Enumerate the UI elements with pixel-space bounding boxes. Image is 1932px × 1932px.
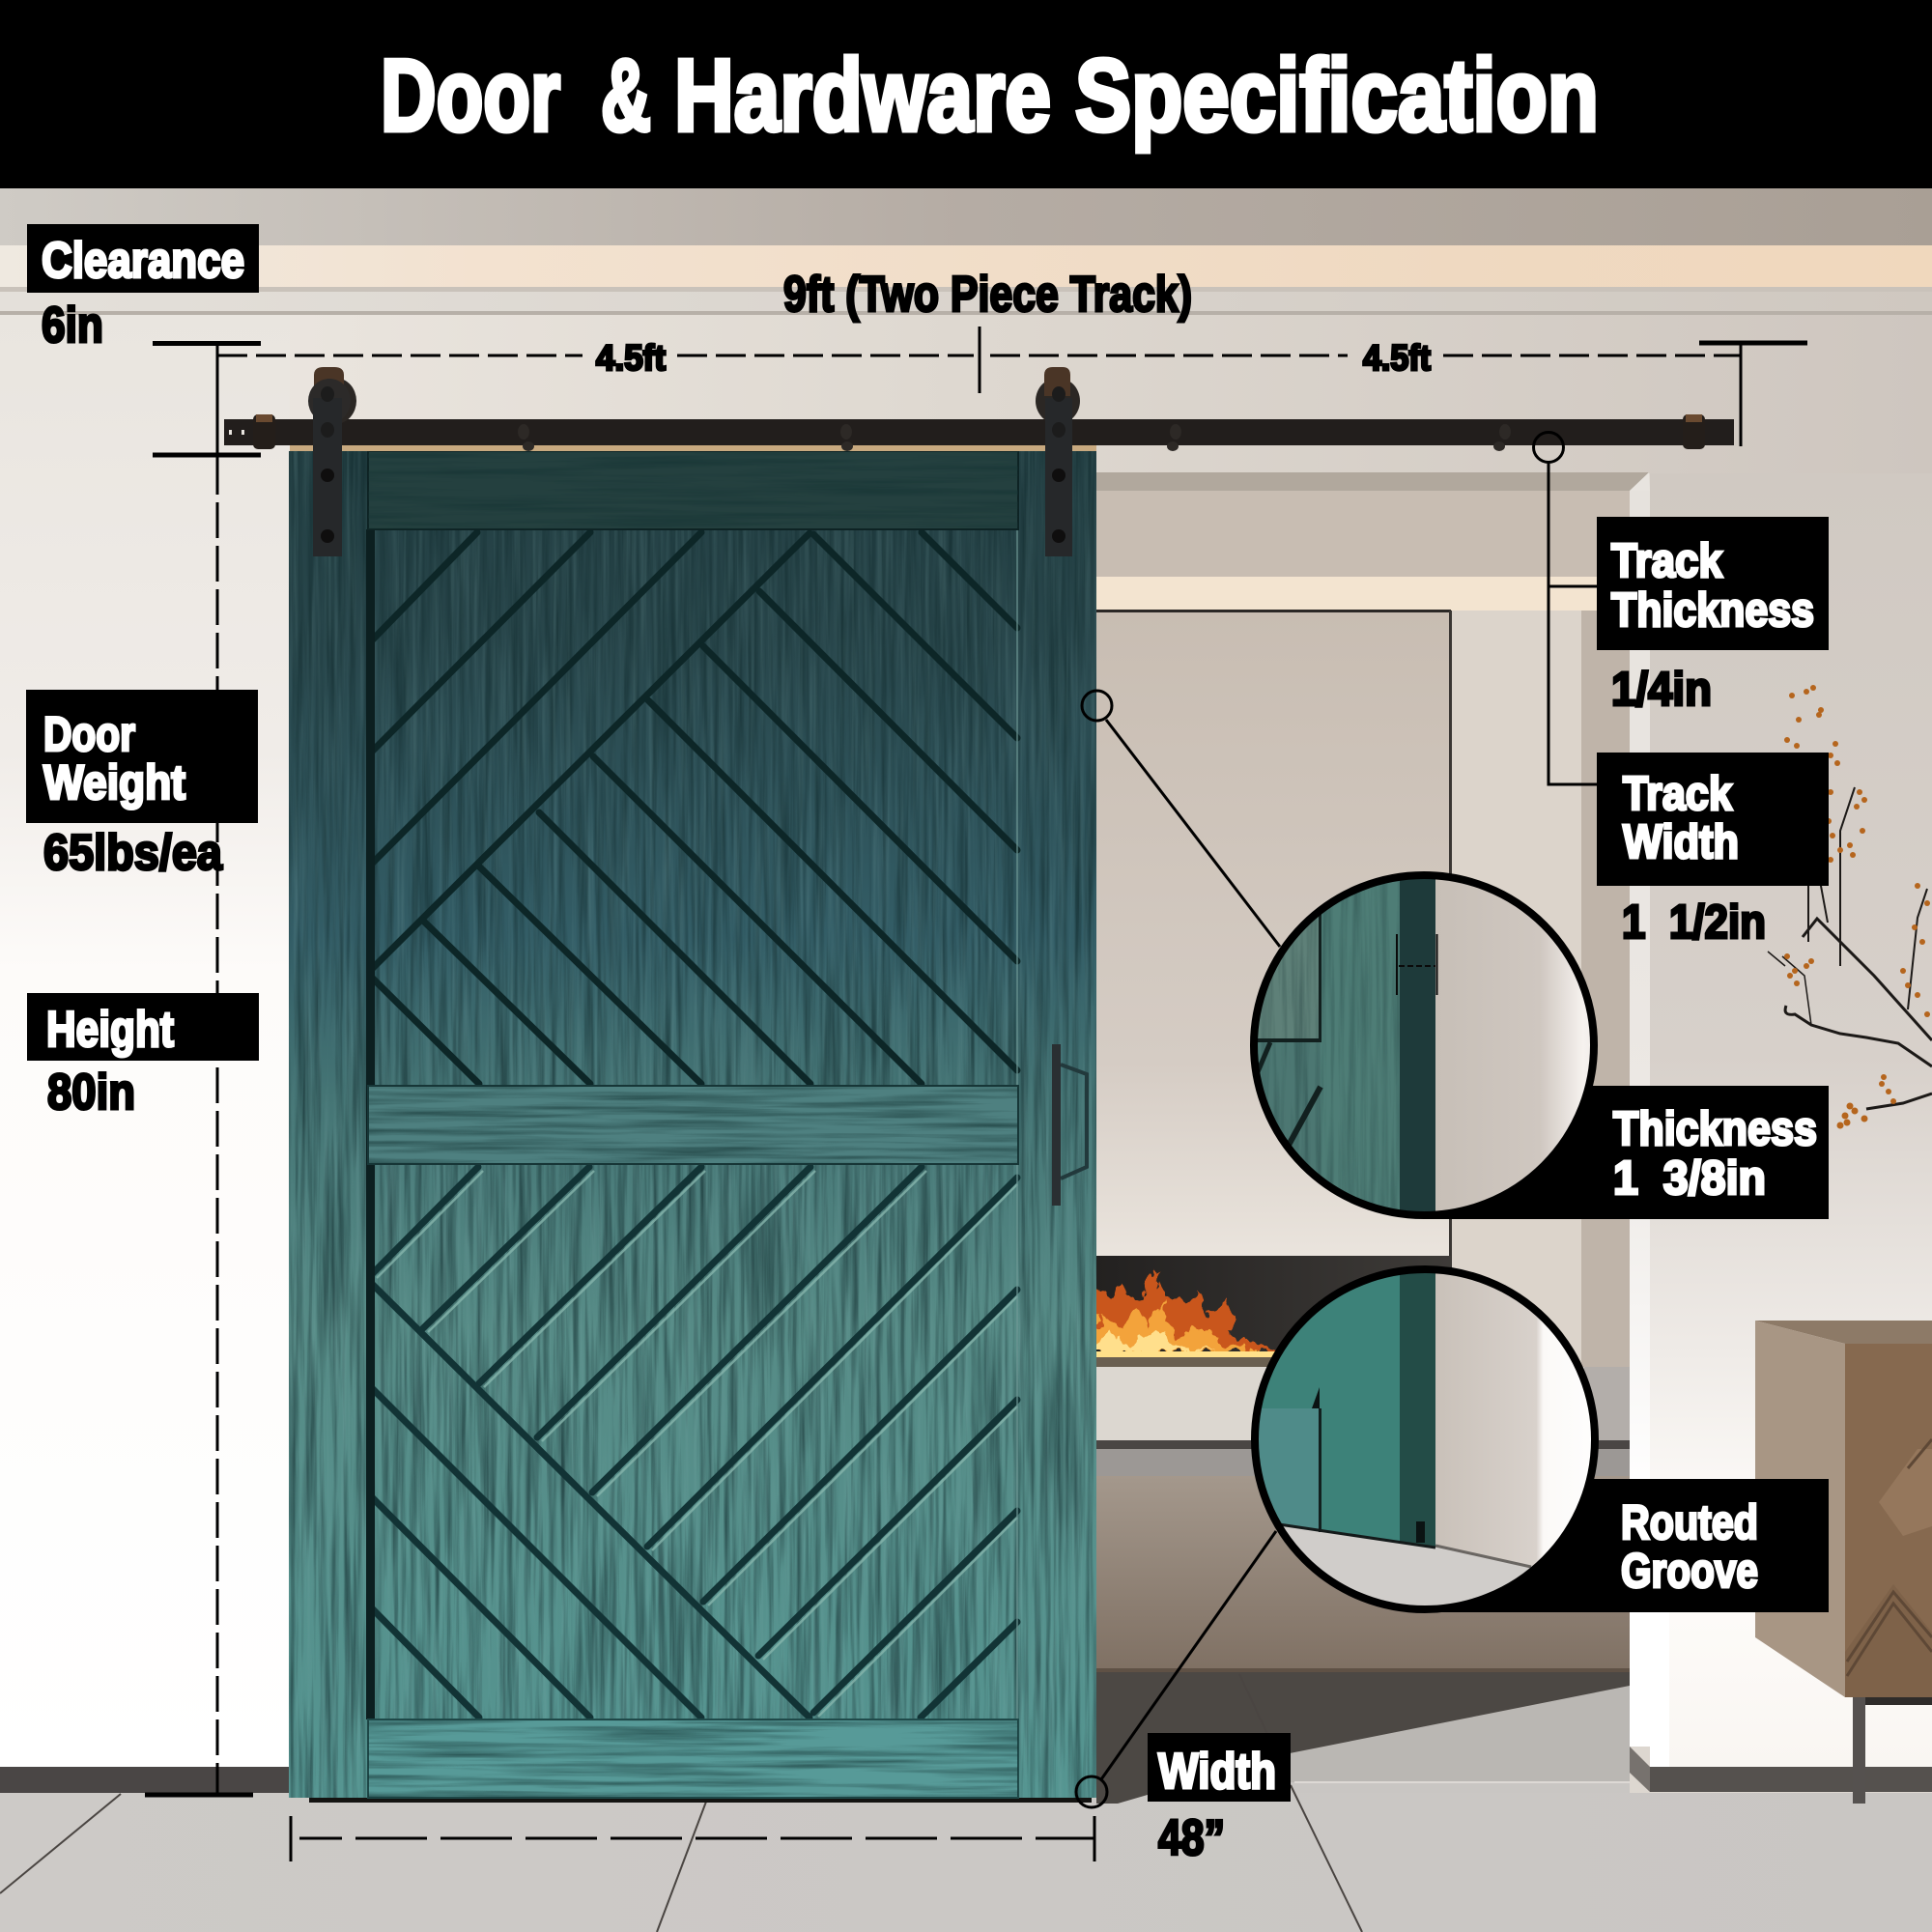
baseboards: [0, 1767, 290, 1793]
ceiling: [0, 188, 1932, 245]
label: door thickness: Thickness: [1613, 1103, 1817, 1155]
floor: [0, 1793, 1932, 1932]
callout leader lines: [1076, 433, 1604, 1807]
label: width: Width: [1158, 1744, 1276, 1800]
label: track width: 1 1/2in: [1622, 896, 1766, 949]
pier: [1630, 491, 1650, 1747]
label: routed groove: Routed: [1621, 1495, 1758, 1549]
track point marker: [1534, 433, 1563, 462]
label: routed groove: Groove: [1621, 1544, 1758, 1598]
label: door weight: 65lbs/ea: [43, 825, 223, 881]
upper panel grooves: [371, 532, 1017, 1084]
dimension lines: track length: [217, 327, 1807, 446]
stile shadows: [366, 529, 375, 1719]
wooden cabinet: [1755, 1321, 1932, 1804]
wood header strip: [290, 445, 1096, 451]
label: door thickness: 1 3/8in: [1613, 1152, 1766, 1205]
label: height: [27, 993, 259, 1121]
door handle: [1052, 1044, 1087, 1206]
label: track thickness: Thickness: [1611, 584, 1814, 637]
flames: [1092, 1270, 1280, 1357]
label: track thickness: Track: [1611, 535, 1723, 587]
left hanger: [308, 367, 356, 556]
label: clearance: [27, 224, 259, 354]
label: door weight: [26, 690, 258, 881]
label: track length: 9ft (Two Piece Track): [783, 267, 1192, 323]
track bolts: [518, 424, 1511, 451]
right hanger: [1036, 367, 1080, 556]
decorative branch with berries: [1768, 685, 1932, 1128]
barn door: [289, 451, 1096, 1803]
track hardware: [224, 367, 1734, 556]
track end holes: [229, 430, 244, 435]
interior alcove: [1096, 472, 1630, 1477]
ceiling glow band: [0, 245, 1932, 289]
title: [381, 39, 1599, 153]
label: width: [1148, 1733, 1291, 1866]
label: track width: [1597, 753, 1829, 949]
groove marker: [1076, 1776, 1107, 1807]
label: track thickness: [1597, 517, 1829, 716]
door slab: [289, 451, 1096, 1798]
dimension lines: clearance and height: [145, 343, 261, 1795]
door shadow: [309, 1795, 1092, 1803]
label: track length: [596, 267, 1431, 378]
top rail: [368, 451, 1018, 529]
label: width: 48”: [1158, 1810, 1225, 1866]
label: routed groove: [1425, 1479, 1829, 1612]
detail circle: door thickness: [1252, 869, 1609, 1224]
label: track width: Track: [1623, 768, 1733, 820]
left wall: [0, 315, 290, 1767]
lower panel groove highlights: [377, 1171, 1017, 1717]
track stops: [253, 414, 1705, 449]
label: track thickness: 1/4in: [1611, 664, 1712, 716]
label: door weight: Weight: [43, 755, 185, 810]
label: clearance: Clearance: [42, 233, 244, 289]
rug: [1096, 1476, 1630, 1672]
label: height: 80in: [47, 1065, 135, 1121]
middle rail: [368, 1086, 1018, 1164]
bottom rail: [368, 1719, 1018, 1798]
dimension lines: door width: [291, 1816, 1094, 1861]
title: Specification: [1075, 39, 1599, 153]
label: track length: 4.5ft: [1363, 338, 1431, 378]
title banner: [0, 0, 1932, 188]
label: height: Height: [46, 1002, 174, 1058]
floor tile joints: [0, 1674, 1630, 1932]
detail circle: routed groove: [1252, 1265, 1609, 1613]
label: door weight: Door: [43, 707, 135, 761]
title: Door: [381, 39, 560, 153]
label: door thickness: [1424, 1086, 1829, 1219]
track rail: [224, 419, 1734, 445]
label: track width: Width: [1623, 816, 1739, 868]
label: track length: 4.5ft: [596, 338, 666, 378]
label: clearance: 6in: [42, 298, 103, 354]
title: &: [601, 39, 651, 153]
right wall: [1650, 473, 1932, 1768]
fireplace: [1096, 1256, 1451, 1356]
wood grain vertical: [289, 451, 1096, 1798]
door thickness marker: [1082, 691, 1112, 721]
title: Hardware: [674, 39, 1051, 153]
lower panel grooves: [372, 1167, 1017, 1718]
